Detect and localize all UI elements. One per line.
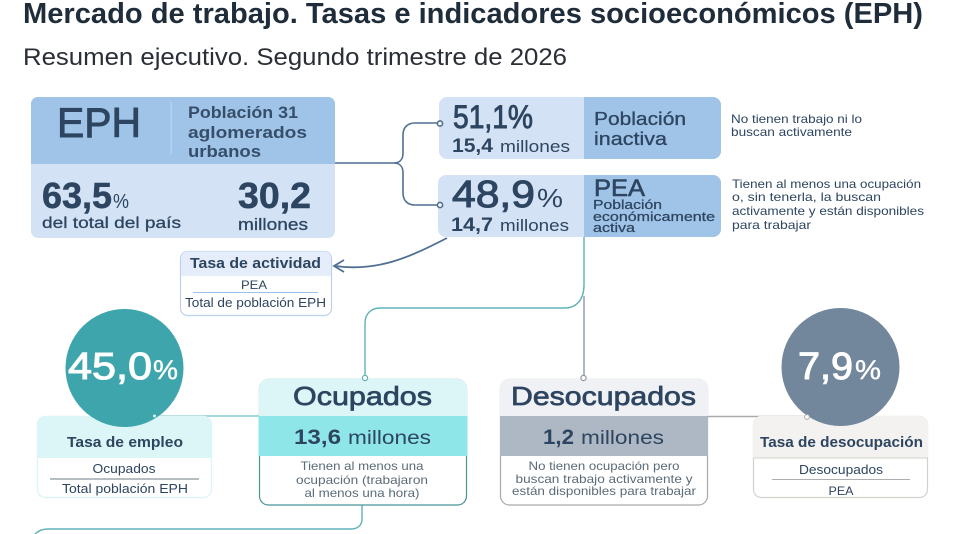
panel: inactive population bbox=[439, 97, 721, 159]
panel: employment rate: Total población EPH bbox=[62, 482, 188, 496]
panel: activity rate: PEA bbox=[241, 278, 267, 292]
text: PEA description bbox=[732, 177, 924, 232]
text: inactive description: No tienen trabajo ni lo bbox=[731, 112, 862, 126]
panel: Desocupados: millones bbox=[581, 427, 664, 449]
panel: employment rate bbox=[37, 416, 212, 498]
description bbox=[296, 459, 428, 500]
connector: Ocupados to employment rate bbox=[155, 415, 259, 417]
panel: inactive population: 15,4 bbox=[452, 136, 493, 157]
panel: employment rate: Ocupados bbox=[92, 462, 156, 476]
circle: employment rate value: % bbox=[153, 355, 178, 385]
stat: share of country: 63,5 bbox=[42, 175, 112, 216]
stat: share of country bbox=[42, 175, 181, 232]
panel: economically active population: activa bbox=[593, 220, 636, 235]
description: están disponibles para trabajar bbox=[512, 484, 696, 498]
stat: share of country: del total del país bbox=[42, 215, 181, 232]
text: inactive description: buscan activamente bbox=[731, 125, 852, 139]
description: ocupación (trabajaron bbox=[296, 473, 428, 487]
connector: PEA to Desocupados bbox=[583, 296, 585, 375]
panel: economically active population: 14,7 bbox=[451, 215, 493, 236]
panel: Ocupados: millones bbox=[348, 427, 431, 449]
connector: Ocupados to lower section bbox=[35, 505, 362, 534]
population description: aglomerados bbox=[188, 123, 307, 142]
arrow: PEA to activity rate bbox=[334, 238, 447, 272]
text: PEA description: para trabajar bbox=[732, 218, 811, 232]
circle: unemployment rate value: % bbox=[855, 355, 881, 385]
panel: unemployment rate: Tasa de desocupación bbox=[760, 435, 923, 451]
description bbox=[512, 459, 696, 498]
panel: economically active population: económicamente bbox=[593, 209, 715, 224]
panel: activity rate: Tasa de actividad bbox=[190, 255, 321, 272]
description: buscan trabajo activamente y bbox=[516, 472, 692, 486]
panel: unemployment rate: PEA bbox=[828, 484, 854, 498]
panel: employment rate: Tasa de empleo bbox=[67, 435, 183, 451]
population description bbox=[188, 103, 307, 161]
circle: employment rate value: 45,0 bbox=[68, 346, 152, 388]
panel: unemployment rate bbox=[753, 416, 928, 498]
panel: economically active population: 48,9 bbox=[452, 174, 535, 216]
panel: Desocupados: Desocupados bbox=[511, 381, 696, 411]
population description: urbanos bbox=[188, 142, 261, 161]
connector: Desocupados to unemployment rate bbox=[708, 416, 806, 418]
population description: Población 31 bbox=[188, 103, 298, 122]
description: Tienen al menos una bbox=[300, 459, 424, 473]
panel: unemployment rate: Desocupados bbox=[799, 463, 883, 477]
panel: economically active population: % bbox=[537, 183, 563, 213]
panel: EPH population bbox=[31, 97, 335, 238]
text: PEA description: activamente y están disponibles bbox=[732, 204, 924, 218]
text: PEA description: Tienen al menos una ocupación bbox=[732, 177, 921, 191]
circle: unemployment rate value bbox=[782, 308, 900, 426]
text: inactive description bbox=[731, 112, 862, 139]
description: al menos una hora) bbox=[304, 486, 420, 500]
panel: inactive population: 51,1% bbox=[453, 99, 533, 135]
subtitle: Resumen ejecutivo. Segundo trimestre de 2026 bbox=[23, 44, 567, 71]
panel: Desocupados bbox=[500, 375, 708, 505]
panel: Ocupados bbox=[258, 375, 468, 505]
panel: Desocupados: 1,2 bbox=[543, 426, 574, 449]
text: PEA description: o, sin tenerla, la buscan bbox=[732, 190, 881, 204]
panel: Ocupados: Ocupados bbox=[293, 381, 432, 411]
connector: EPH to population branches bbox=[335, 121, 443, 208]
panel: inactive population: Población bbox=[594, 109, 686, 129]
stat: share of country: % bbox=[113, 191, 129, 213]
EPH heading: EPH bbox=[57, 99, 141, 146]
panel: economically active population: PEA bbox=[594, 175, 645, 202]
panel: inactive population: millones bbox=[500, 138, 570, 156]
panel: economically active population bbox=[438, 174, 721, 237]
description: No tienen ocupación pero bbox=[528, 459, 680, 473]
stat: millions: 30,2 bbox=[238, 175, 311, 216]
panel: economically active population: millones bbox=[500, 217, 569, 235]
panel: Ocupados: 13,6 bbox=[294, 426, 341, 449]
panel: activity rate: Total de población EPH bbox=[185, 296, 326, 310]
circle: employment rate value bbox=[66, 309, 184, 427]
panel: inactive population: inactiva bbox=[594, 129, 668, 149]
stat: millions bbox=[238, 175, 311, 234]
panel: economically active population: Población bbox=[593, 197, 662, 212]
circle: unemployment rate value: 7,9 bbox=[798, 346, 853, 388]
connector: PEA to Ocupados bbox=[365, 237, 584, 375]
stat: millions: millones bbox=[238, 215, 308, 234]
panel: activity rate bbox=[180, 252, 332, 316]
